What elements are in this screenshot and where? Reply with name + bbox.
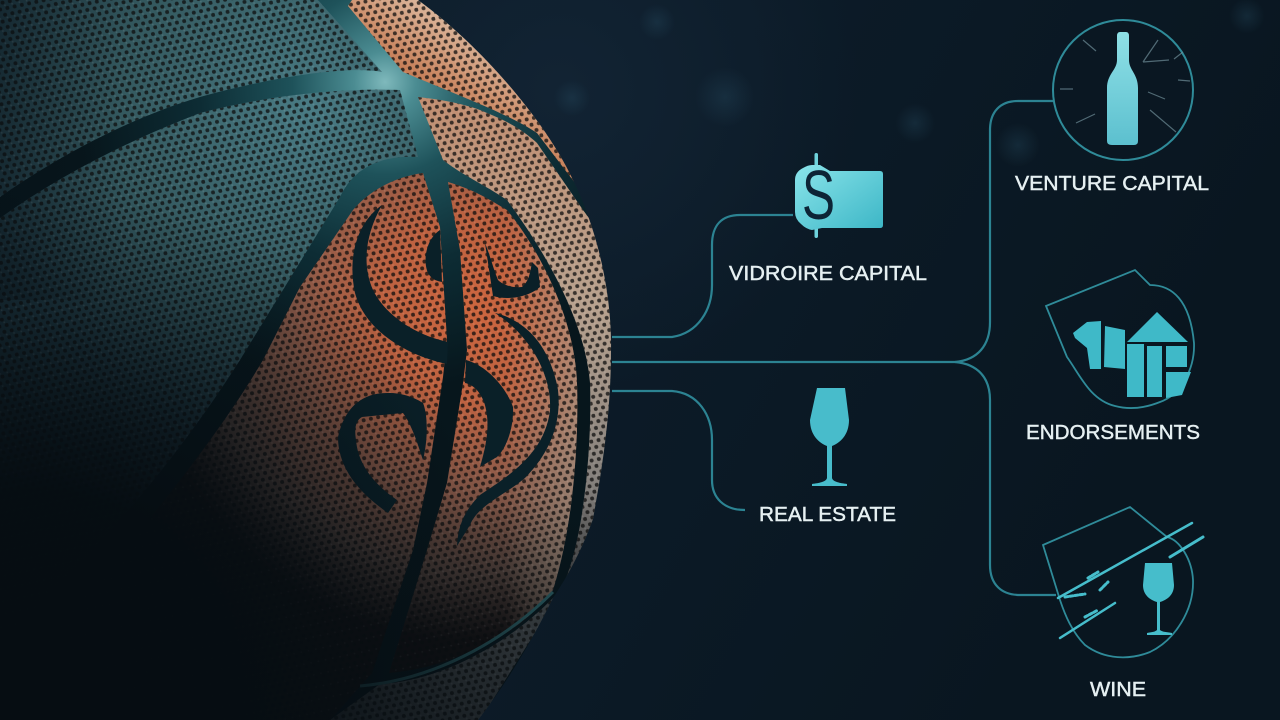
icon: wine glass and lines in shield [1043,507,1203,657]
icon: wine glass [810,388,849,486]
connector: real estate [612,391,745,510]
label: wine: WINE [1090,679,1146,701]
connector: vidroire capital [612,215,793,337]
label: endorsements: ENDORSEMENTS [1026,422,1200,444]
label: real estate: REAL ESTATE [759,504,896,526]
icon: dollar card [795,153,883,238]
icon: dollar card: S [802,156,835,234]
basketball with dollar sign [0,0,620,720]
seam highlights [360,592,553,686]
dollar sign [338,205,559,546]
connector: wine [955,362,1056,595]
icon: bottle in circle [1053,20,1193,160]
connector lines [612,101,1056,595]
ball panels [0,0,620,720]
ball shading [0,0,620,720]
ball dimple texture [0,0,620,720]
ball seams base [0,0,590,608]
connector: main trunk to right column [612,101,1054,362]
label: venture capital: VENTURE CAPITAL [1015,173,1209,195]
label: vidroire capital: VIDROIRE CAPITAL [729,263,927,285]
icon: buildings in shield [1046,270,1194,408]
